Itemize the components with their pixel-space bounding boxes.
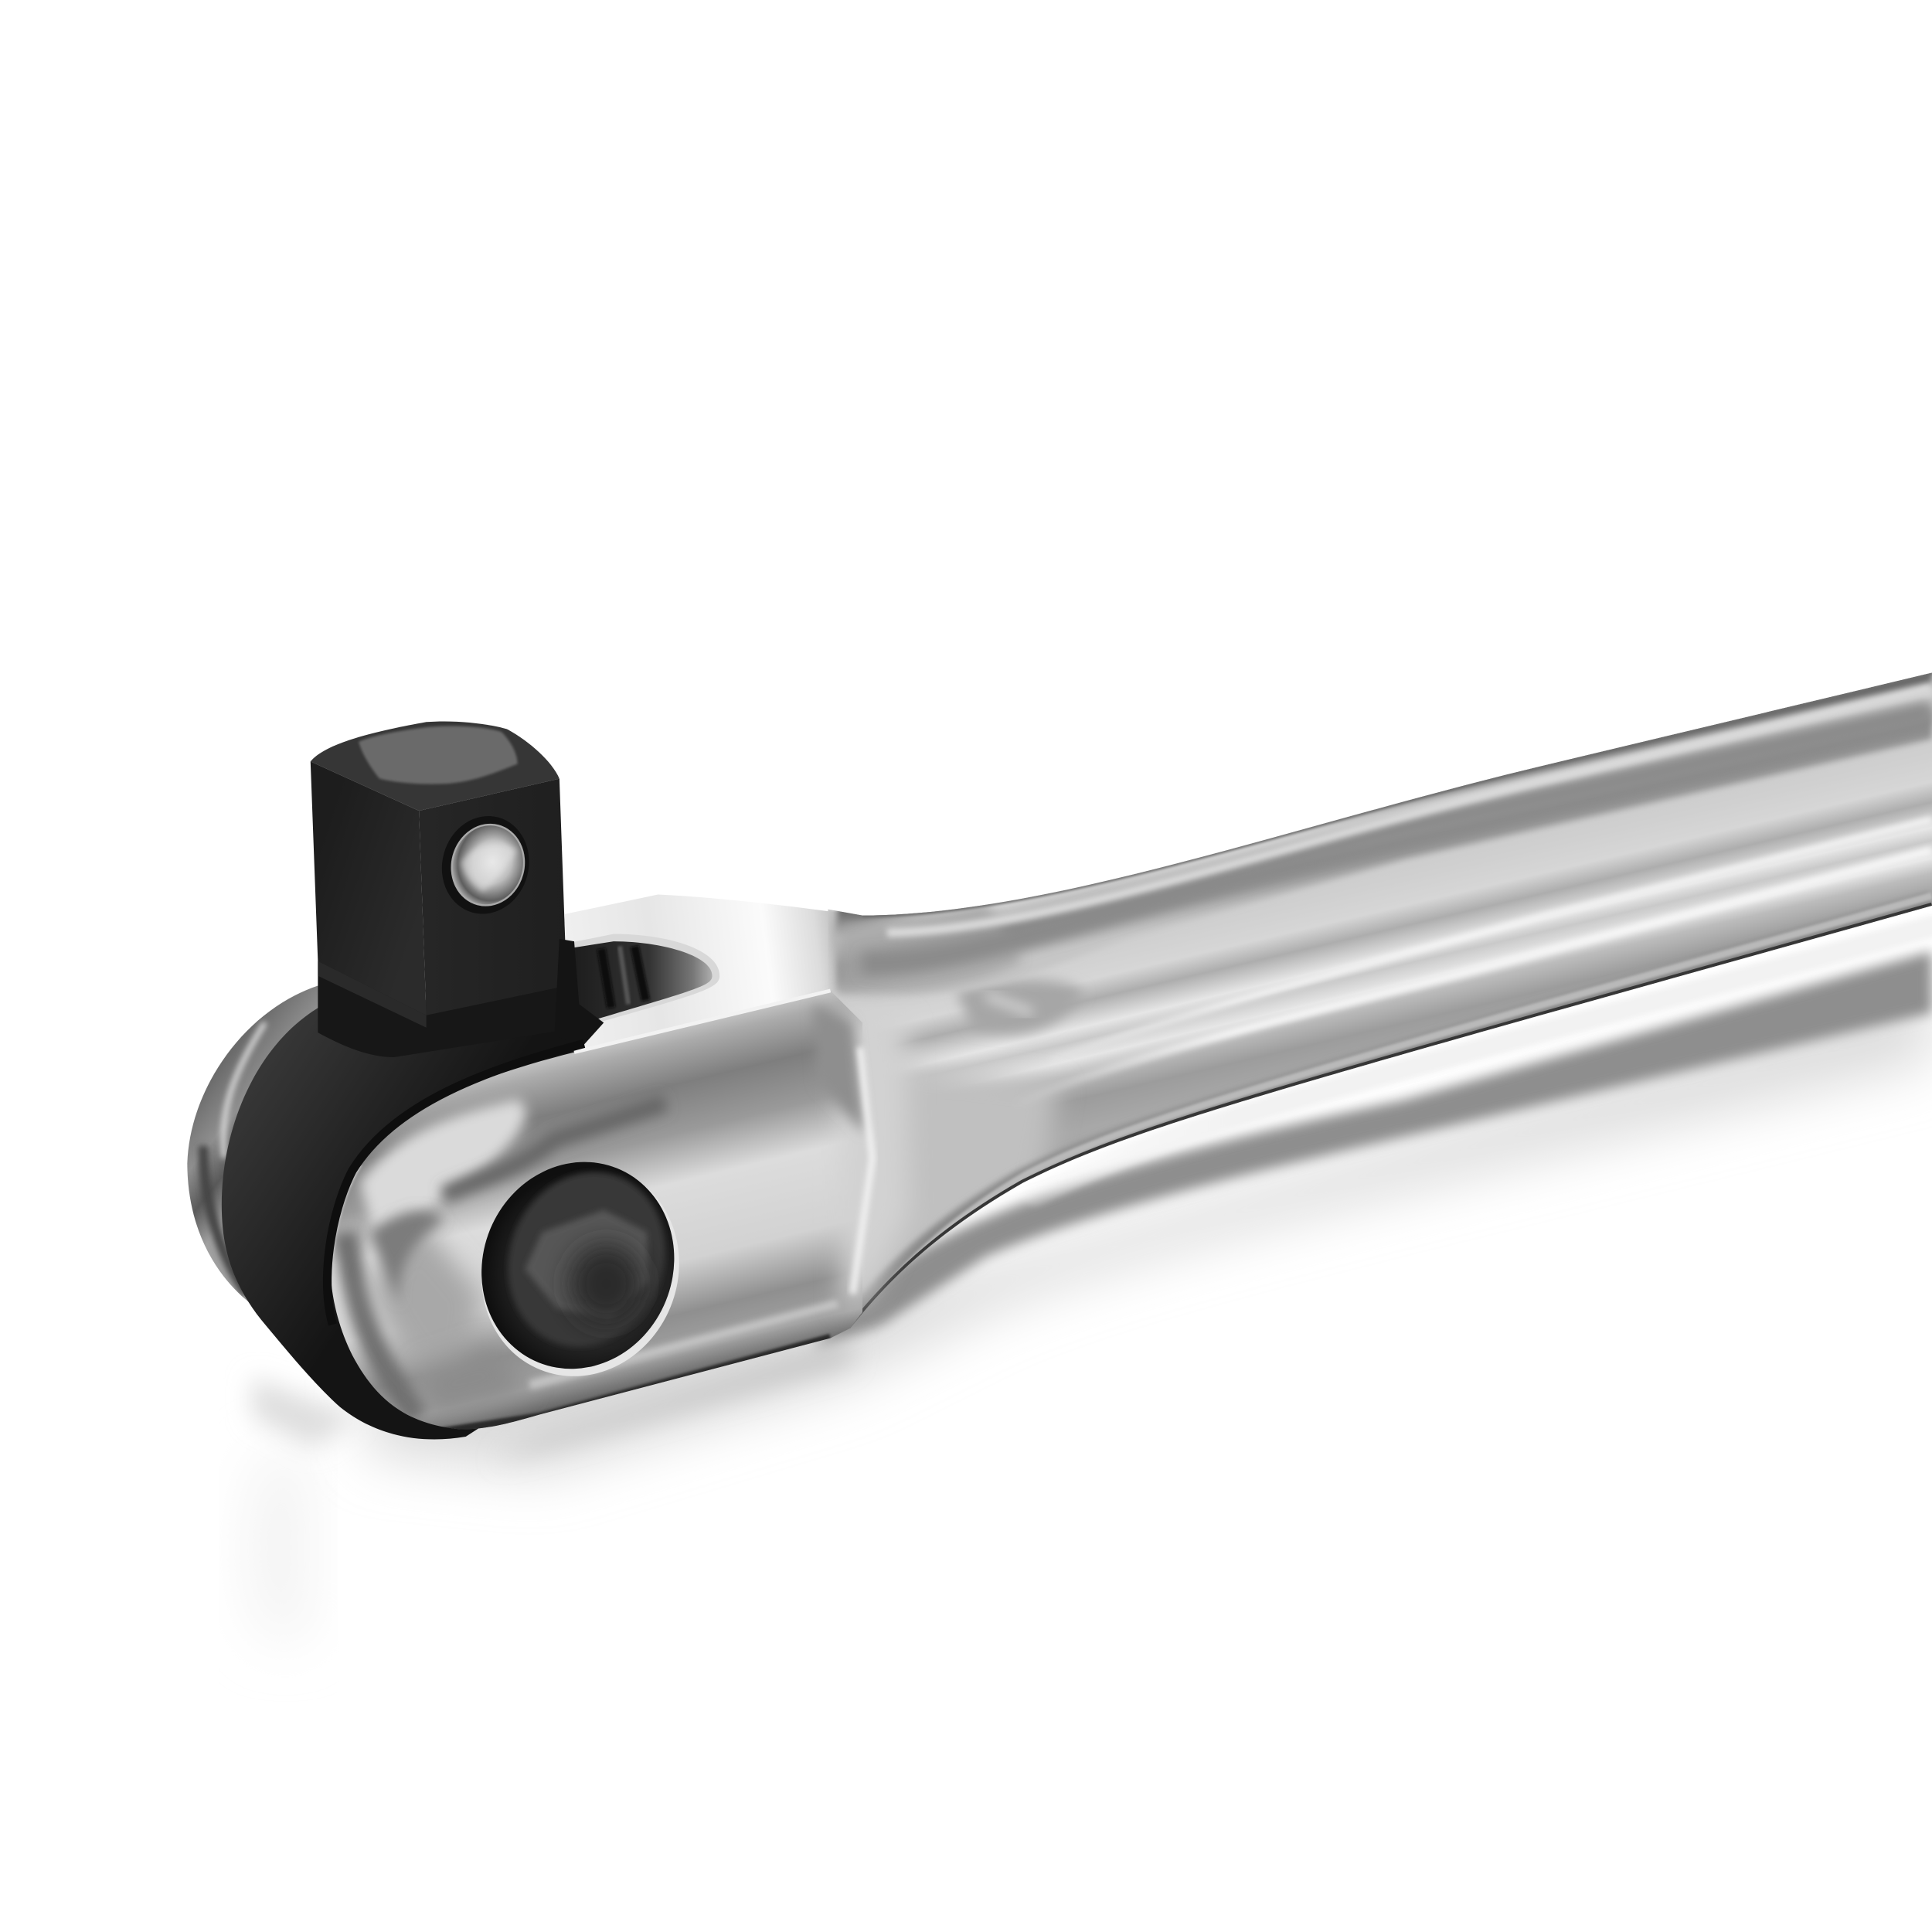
shaft body xyxy=(813,653,1932,1355)
right face xyxy=(419,779,566,1015)
square drive xyxy=(311,721,579,1057)
collar shoulder over slot xyxy=(554,939,604,1047)
dark stroke in ball xyxy=(444,1103,665,1196)
top cap xyxy=(359,726,518,784)
left face xyxy=(311,761,427,1015)
tube dark core xyxy=(862,711,1932,964)
floor reflection and shadow xyxy=(249,927,1932,1639)
tube shoulder shading xyxy=(833,902,1022,994)
collar xyxy=(318,949,579,1057)
black rubber drum xyxy=(222,1008,591,1440)
slot opening xyxy=(554,934,719,1047)
highlight stripes xyxy=(1049,819,1932,1060)
black gap around head xyxy=(328,1043,584,1325)
detent ball xyxy=(443,816,533,913)
chamfer strip xyxy=(318,961,427,1028)
tube top edge xyxy=(862,673,1932,916)
white rim on left xyxy=(332,1165,362,1260)
chrome head xyxy=(332,992,862,1430)
hex shadow xyxy=(570,1244,643,1323)
illustration: chrome ratchet wrench xyxy=(187,672,1932,1594)
top bevel xyxy=(311,721,560,811)
top flat of head xyxy=(564,895,862,1053)
back chrome disc xyxy=(187,986,318,1301)
hole interior xyxy=(451,1133,705,1398)
lower edge bands xyxy=(850,906,1932,1328)
head white top edge xyxy=(574,991,831,1053)
reflection patch xyxy=(956,980,1084,1033)
lower-left dark xyxy=(425,1341,521,1412)
bottom dark edge xyxy=(444,1338,831,1432)
socket hole xyxy=(450,1133,711,1406)
hex screw head xyxy=(525,1210,648,1318)
tube light strip xyxy=(887,688,1932,933)
head-to-shaft blend xyxy=(813,1004,910,1308)
upper shaft tube xyxy=(829,672,1932,998)
detent ball socket xyxy=(431,806,540,923)
hole inner wall xyxy=(482,1148,691,1370)
hole rim xyxy=(450,1134,711,1406)
upper-left reflection xyxy=(354,1094,532,1232)
